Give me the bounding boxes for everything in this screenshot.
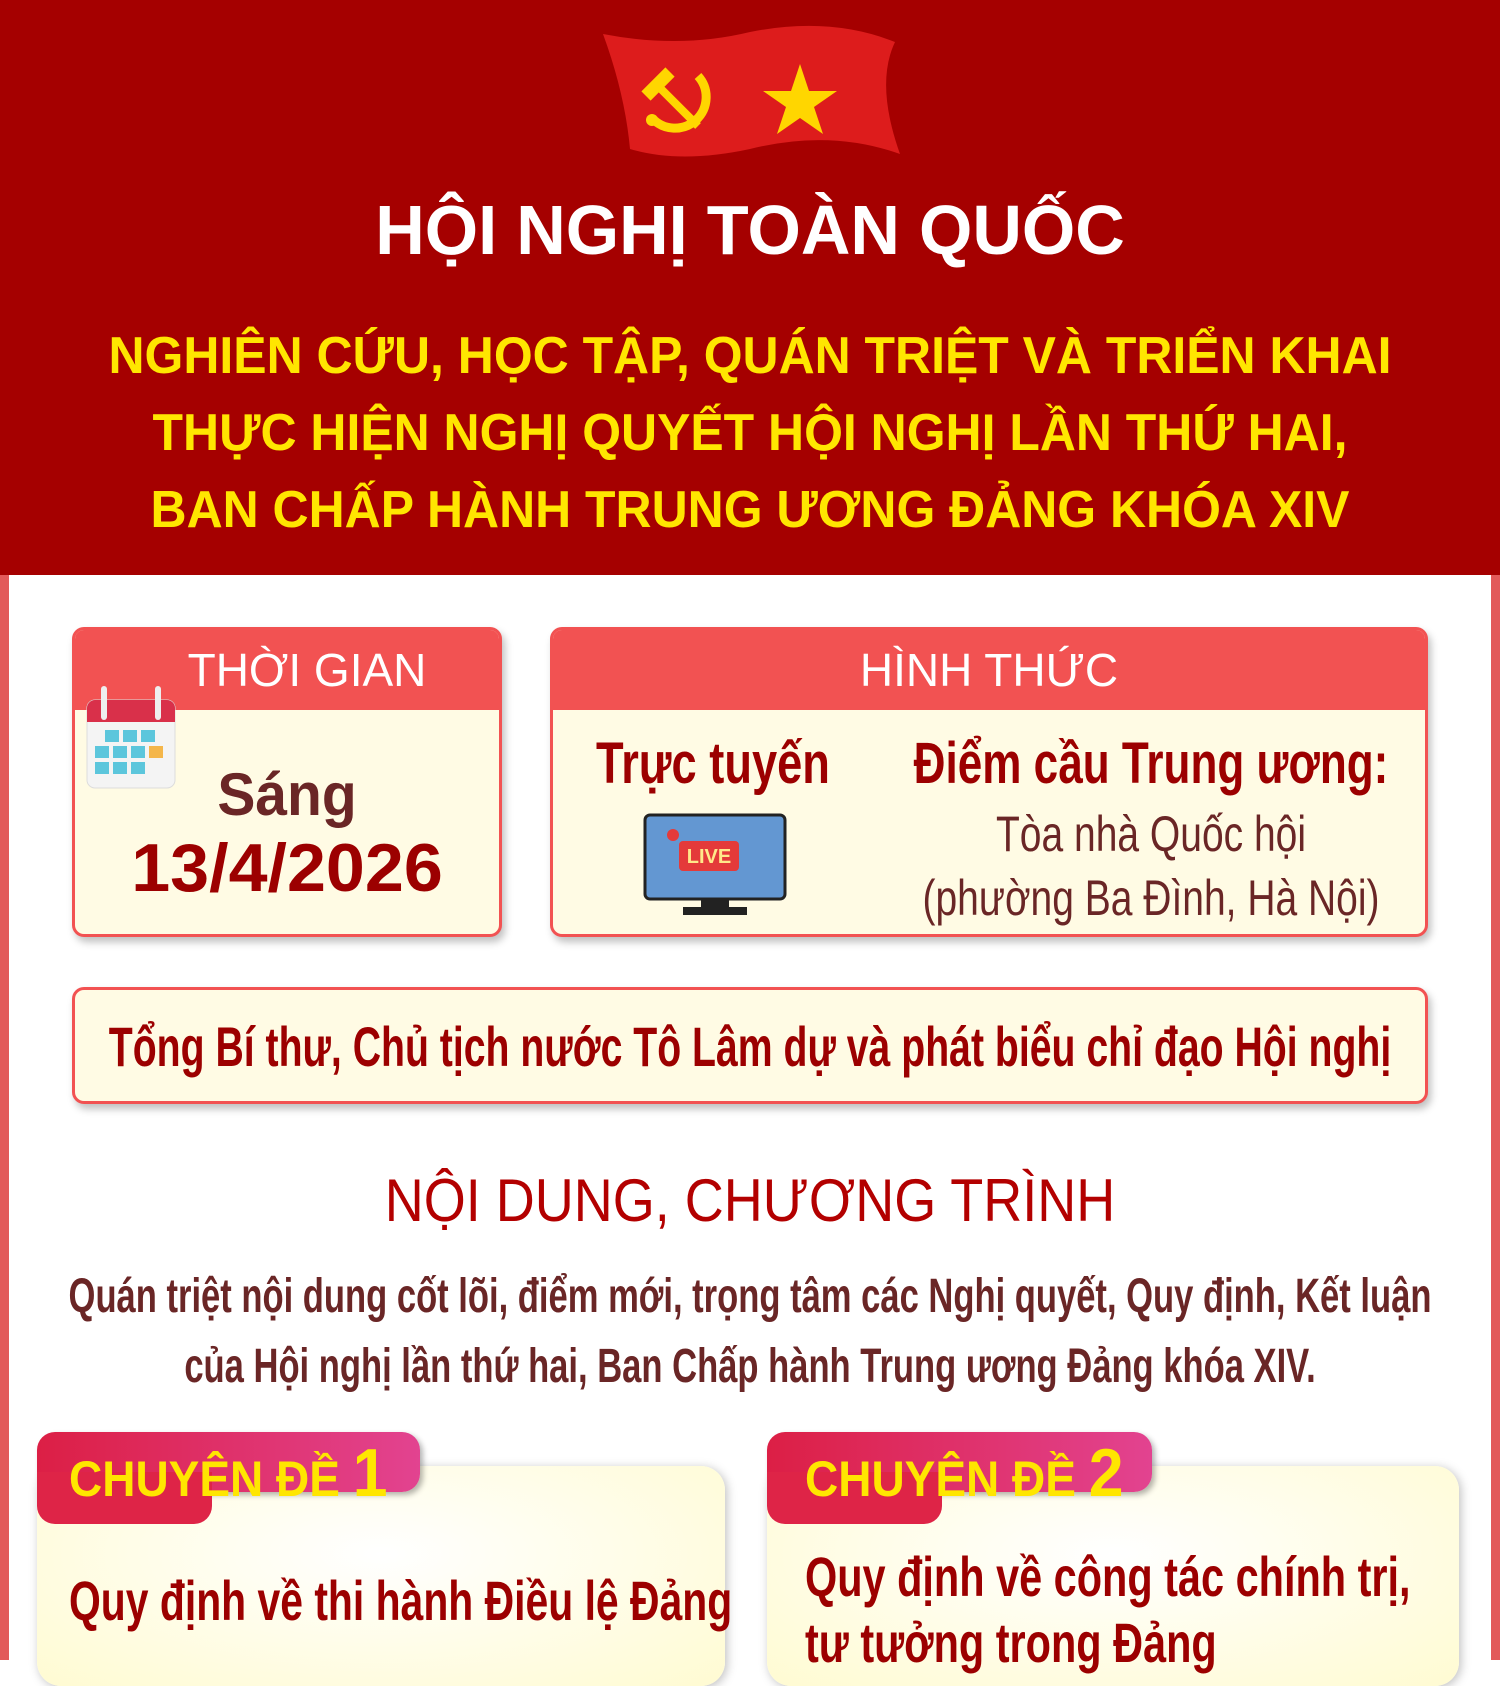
text: diem cau: Điểm cầu Trung ương:: [914, 731, 1388, 796]
subtitle: BAN CHẤP HÀNH TRUNG ƯƠNG ĐẢNG KHÓA XIV: [151, 481, 1349, 539]
icon: live tv: [644, 814, 786, 915]
panel: tong bi thu: Tổng Bí thư, Chủ tịch nước Tô Lâm dự và phát biểu chỉ đạo Hội nghị: [109, 1015, 1391, 1078]
panel: tong bi thu: [72, 987, 1428, 1104]
header band: [0, 0, 1500, 575]
panel: thoi gian: 13/4/2026: [131, 830, 443, 906]
text: truc tuyen: Trực tuyến: [596, 731, 830, 796]
text: topic 1: Quy định về thi hành Điều lệ Đảng: [69, 1569, 732, 1632]
subtitle: [108, 326, 1392, 539]
heading: thoi gian: [75, 630, 499, 710]
subtitle: NGHIÊN CỨU, HỌC TẬP, QUÁN TRIỆT VÀ TRIỂN KHAI: [108, 327, 1392, 385]
side borders: [0, 0, 9, 1660]
panel: thoi gian: [72, 627, 502, 937]
panel: chuyen de 2: [764, 1432, 1466, 1686]
text: noi dung description: của Hội nghị lần thứ hai, Ban Chấp hành Trung ương Đảng khóa XIV.: [184, 1340, 1316, 1393]
icon: flag: [603, 26, 900, 156]
panel: chuyen de 1: [34, 1432, 732, 1686]
tab: chuyen de 2: [767, 1432, 1152, 1492]
panel: chuyen de 1: CHUYÊN ĐỀ 1: [69, 1435, 388, 1511]
heading: noi dung: NỘI DUNG, CHƯƠNG TRÌNH: [385, 1167, 1115, 1234]
text: topic 2: tư tưởng trong Đảng: [805, 1611, 1217, 1674]
panel: chuyen de 2: CHUYÊN ĐỀ 2: [805, 1435, 1124, 1511]
text: topic 2: [805, 1545, 1411, 1674]
text: topic 2: Quy định về công tác chính trị,: [805, 1545, 1411, 1608]
text: date: Sáng: [217, 761, 357, 828]
heading: thoi gian: THỜI GIAN: [188, 644, 426, 696]
heading: hinh thuc: [553, 630, 1425, 710]
icon: live tv: LIVE: [687, 846, 731, 868]
heading: hinh thuc: HÌNH THỨC: [860, 644, 1118, 696]
text: noi dung description: [69, 1270, 1431, 1393]
subtitle: THỰC HIỆN NGHỊ QUYẾT HỘI NGHỊ LẦN THỨ HAI,: [153, 404, 1347, 462]
panel: hinh thuc: Tòa nhà Quốc hội: [996, 806, 1306, 862]
tab: chuyen de 1: [37, 1432, 420, 1492]
panel: hinh thuc: [550, 627, 1428, 937]
icon: calendar: [86, 686, 176, 788]
text: noi dung description: Quán triệt nội dung cốt lõi, điểm mới, trọng tâm các Nghị quyết, Quy định, Kết luận: [69, 1270, 1431, 1323]
panel: hinh thuc: (phường Ba Đình, Hà Nội): [922, 870, 1380, 926]
title: HỘI NGHỊ TOÀN QUỐC: [375, 191, 1125, 269]
